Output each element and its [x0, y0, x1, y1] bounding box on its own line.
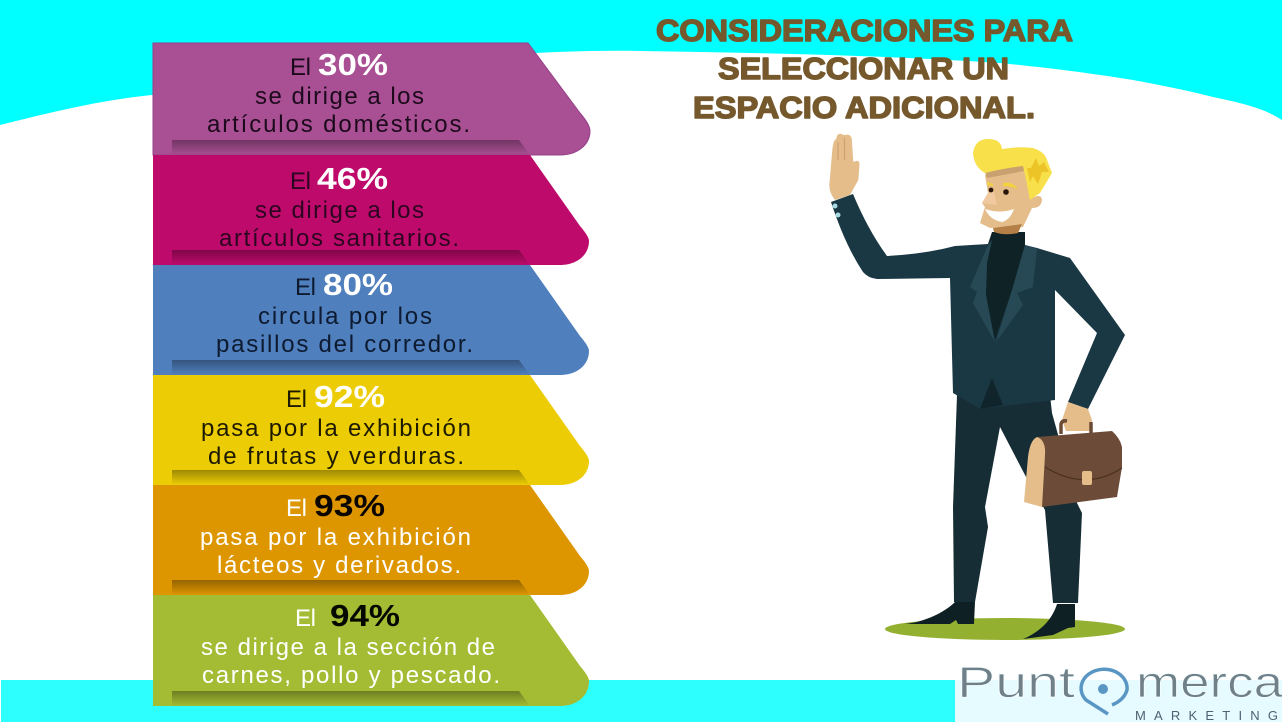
title: ESPACIO ADICIONAL. [693, 90, 1035, 125]
hand holding briefcase [1062, 402, 1092, 431]
banner: 93%: 93% [314, 488, 385, 523]
banner: 46%: 46% [317, 161, 388, 196]
briefcase flap [1045, 467, 1122, 480]
banner: 92%: El [286, 386, 307, 413]
banner: 30%: 30% [318, 47, 388, 82]
ground ellipse [885, 618, 1125, 640]
face [980, 162, 1042, 228]
banner: 46%: se dirige a los [255, 197, 424, 224]
eyebrows [987, 182, 1018, 189]
logo wordmark right: merca [1136, 658, 1282, 707]
title: SELECCIONAR UN [718, 51, 1009, 86]
lapels [970, 240, 1037, 342]
banner: 30% [153, 43, 590, 155]
nose [982, 192, 997, 205]
fingers [838, 138, 844, 160]
smile [985, 209, 1014, 222]
logo wordmark left: Punt [957, 658, 1075, 707]
banner: 94%: 94% [330, 598, 400, 633]
raised hand [829, 134, 859, 200]
eyes [989, 188, 993, 192]
banner: 94%: se dirige a la sección de [201, 634, 495, 661]
briefcase handle [1061, 421, 1091, 434]
briefcase clasp [1082, 471, 1092, 485]
banner: 30%: se dirige a los [255, 83, 424, 110]
title: CONSIDERACIONES PARA [656, 13, 1073, 48]
banner: 46%: artículos sanitarios. [219, 225, 459, 252]
banner: 94% [153, 595, 589, 706]
banner: 46% [153, 155, 589, 265]
banner: 92%: 92% [314, 379, 385, 414]
banner: 93%: lácteos y derivados. [217, 552, 461, 579]
logo background [955, 680, 1282, 722]
banner: 93% [153, 485, 589, 595]
hair [973, 139, 1052, 200]
cuff buttons [832, 204, 838, 208]
banner: 93%: El [286, 495, 307, 522]
jacket vent [980, 378, 1003, 409]
banner: 94%: El [295, 605, 316, 632]
banner: 80%: 80% [323, 267, 393, 302]
banner: 80% [153, 265, 589, 375]
hairline shadow [985, 160, 1028, 178]
banner: 80%: pasillos del corredor. [216, 331, 473, 358]
banner: 46%: El [290, 168, 311, 195]
title [656, 13, 1073, 125]
logo: PuntoMerca Marketing [955, 658, 1282, 722]
logo pin [1081, 669, 1127, 714]
trousers [953, 395, 1082, 603]
briefcase side [1024, 437, 1045, 507]
background: cyan band bottom [1, 680, 955, 722]
briefcase body [1037, 431, 1122, 507]
banner: 80%: El [295, 274, 316, 301]
banner: 30%: El [290, 54, 311, 81]
banner: 92%: pasa por la exhibición [201, 415, 471, 442]
jacket and arms [831, 194, 1125, 409]
banner: 92%: de frutas y verduras. [208, 443, 464, 470]
turtleneck [985, 232, 1025, 340]
neck shadow [993, 224, 1022, 234]
banner: 30%: artículos domésticos. [207, 111, 470, 138]
banner: 94%: carnes, pollo y pescado. [202, 662, 500, 689]
background: cyan wave top [0, 0, 1282, 125]
illustration: businessman waving with briefcase [829, 134, 1125, 640]
shoes [905, 602, 1075, 639]
banner: 93%: pasa por la exhibición [200, 524, 471, 551]
banner: 80%: circula por los [258, 303, 432, 330]
banner: 92% [153, 375, 589, 485]
